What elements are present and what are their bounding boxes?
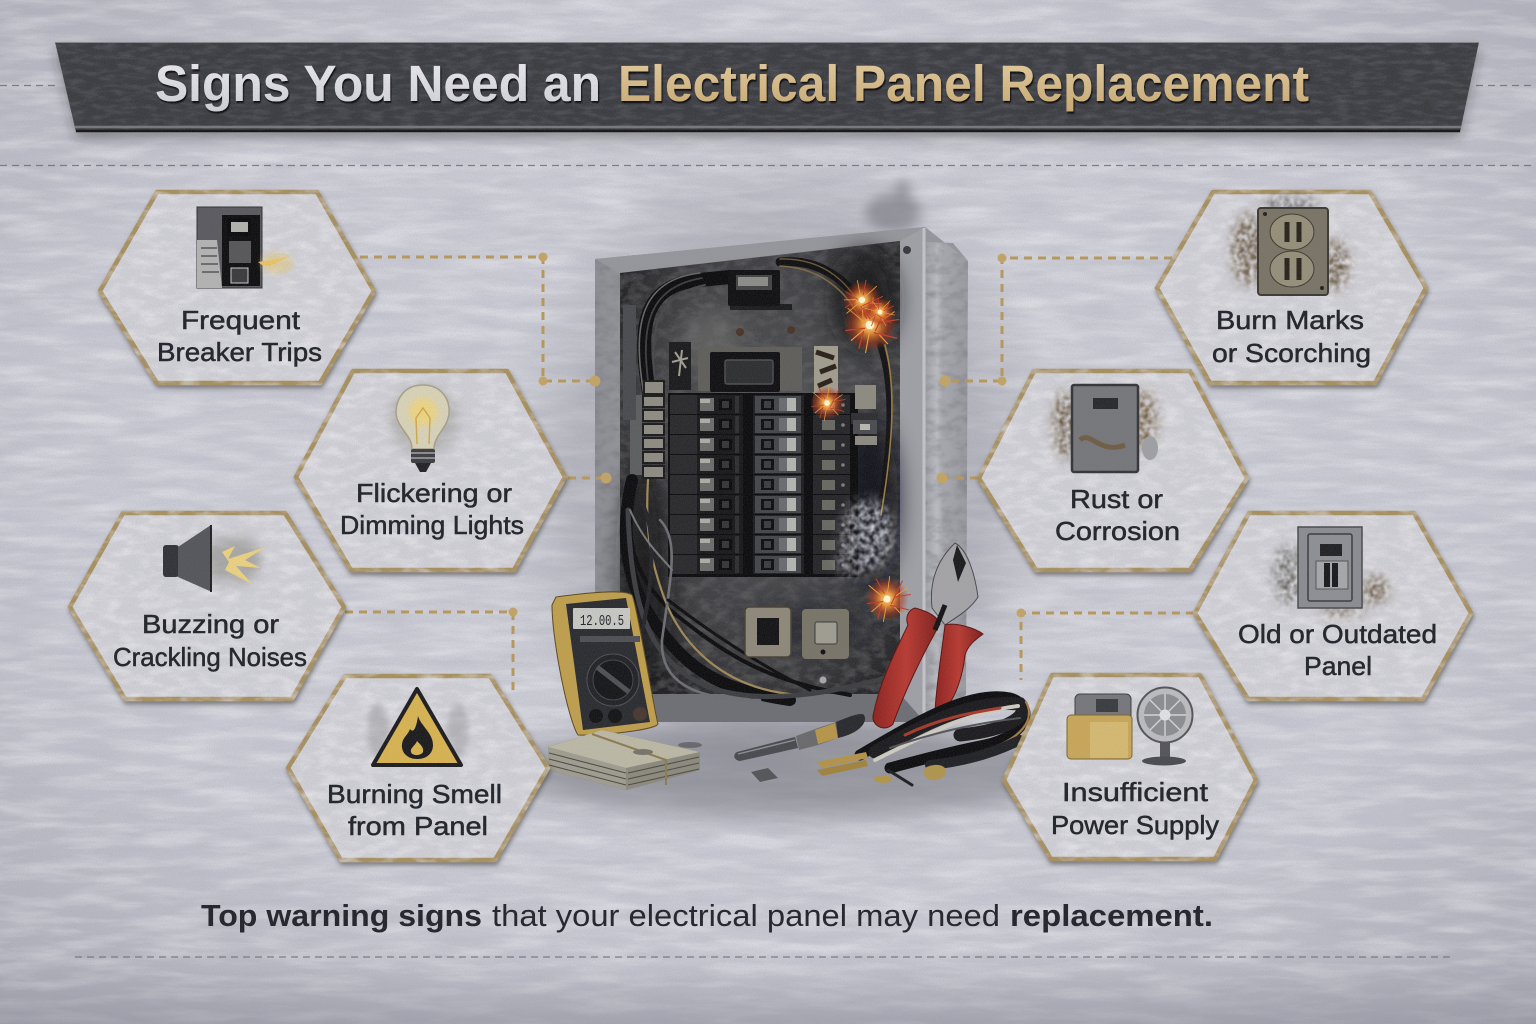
label: Corrosion — [1055, 516, 1180, 546]
panel enclosure — [595, 227, 968, 722]
label — [157, 305, 322, 367]
label — [340, 478, 524, 540]
burned label — [814, 346, 838, 394]
footer caption: replacement. — [1010, 898, 1213, 933]
label — [113, 609, 307, 672]
icon: light bulb — [389, 385, 459, 472]
hexagon: Burning Smell from Panel — [288, 676, 548, 860]
multimeter: 12.00.5 — [580, 613, 624, 630]
label: Breaker Trips — [157, 337, 322, 367]
title banner — [55, 42, 1479, 132]
stack of cash — [548, 730, 700, 790]
top meter block — [728, 270, 792, 310]
damaged receptacles — [745, 607, 849, 684]
main breaker block — [669, 326, 802, 392]
label: Buzzing or — [142, 609, 279, 639]
lower wires — [626, 480, 905, 700]
label: Burning Smell — [327, 779, 502, 809]
label: Old or Outdated — [1238, 619, 1437, 649]
dashed connectors — [345, 252, 1194, 690]
label: Burn Marks — [1216, 305, 1364, 335]
footer caption: that your electrical panel may need — [492, 898, 1000, 933]
footer caption: Top warning signs — [201, 898, 482, 933]
label: Flickering or — [356, 478, 512, 508]
icon: rusted panel — [1053, 385, 1158, 472]
multimeter — [552, 592, 658, 735]
hexagon: Old or Outdated Panel — [1195, 513, 1471, 699]
label: from Panel — [348, 811, 488, 841]
screwdriver — [734, 714, 865, 761]
title text: Electrical Panel Replacement — [618, 55, 1309, 112]
sparks — [810, 272, 910, 622]
label: Insufficient — [1062, 777, 1209, 807]
icon: scorched outlet — [1232, 197, 1349, 295]
label: Frequent — [181, 305, 301, 335]
hexagon: Insufficient Power Supply — [1004, 675, 1256, 859]
label: Power Supply — [1051, 810, 1219, 840]
label — [1051, 777, 1219, 840]
pliers — [873, 543, 983, 728]
central scene: damaged electrical panel and tools — [548, 178, 1029, 790]
label: Panel — [1304, 651, 1372, 681]
label: Crackling Noises — [113, 642, 307, 672]
wire bundle — [817, 697, 1029, 785]
title text: Signs You Need an — [155, 55, 601, 112]
hexagon: Flickering or Dimming Lights — [296, 371, 565, 570]
hexagon: Rust or Corrosion — [979, 371, 1247, 570]
footer caption — [201, 898, 1213, 933]
upper wires — [639, 259, 892, 515]
hexagon: Burn Marks or Scorching — [1157, 192, 1426, 383]
icon: breaker — [197, 207, 296, 288]
smoke above panel — [865, 178, 921, 232]
icon: speaker with bolts — [163, 525, 266, 592]
label — [1212, 305, 1371, 368]
right terminal — [851, 385, 878, 445]
label: Dimming Lights — [340, 510, 524, 540]
terminal block — [623, 305, 664, 478]
label — [1055, 484, 1180, 546]
hexagon: Frequent Breaker Trips — [100, 192, 374, 383]
label — [1238, 619, 1437, 681]
hexagon: Buzzing or Crackling Noises — [70, 513, 344, 699]
smoke inside panel — [837, 499, 894, 578]
soot inside panel — [623, 250, 898, 680]
floor debris — [678, 742, 778, 782]
label — [327, 779, 502, 841]
title text — [155, 55, 1309, 112]
icon: warning triangle with flame — [367, 689, 469, 765]
circuit breakers — [668, 393, 858, 577]
label: or Scorching — [1212, 338, 1371, 368]
icon: power unit and fan — [1067, 688, 1192, 766]
label: Rust or — [1070, 484, 1163, 514]
icon: old panel — [1274, 527, 1389, 616]
